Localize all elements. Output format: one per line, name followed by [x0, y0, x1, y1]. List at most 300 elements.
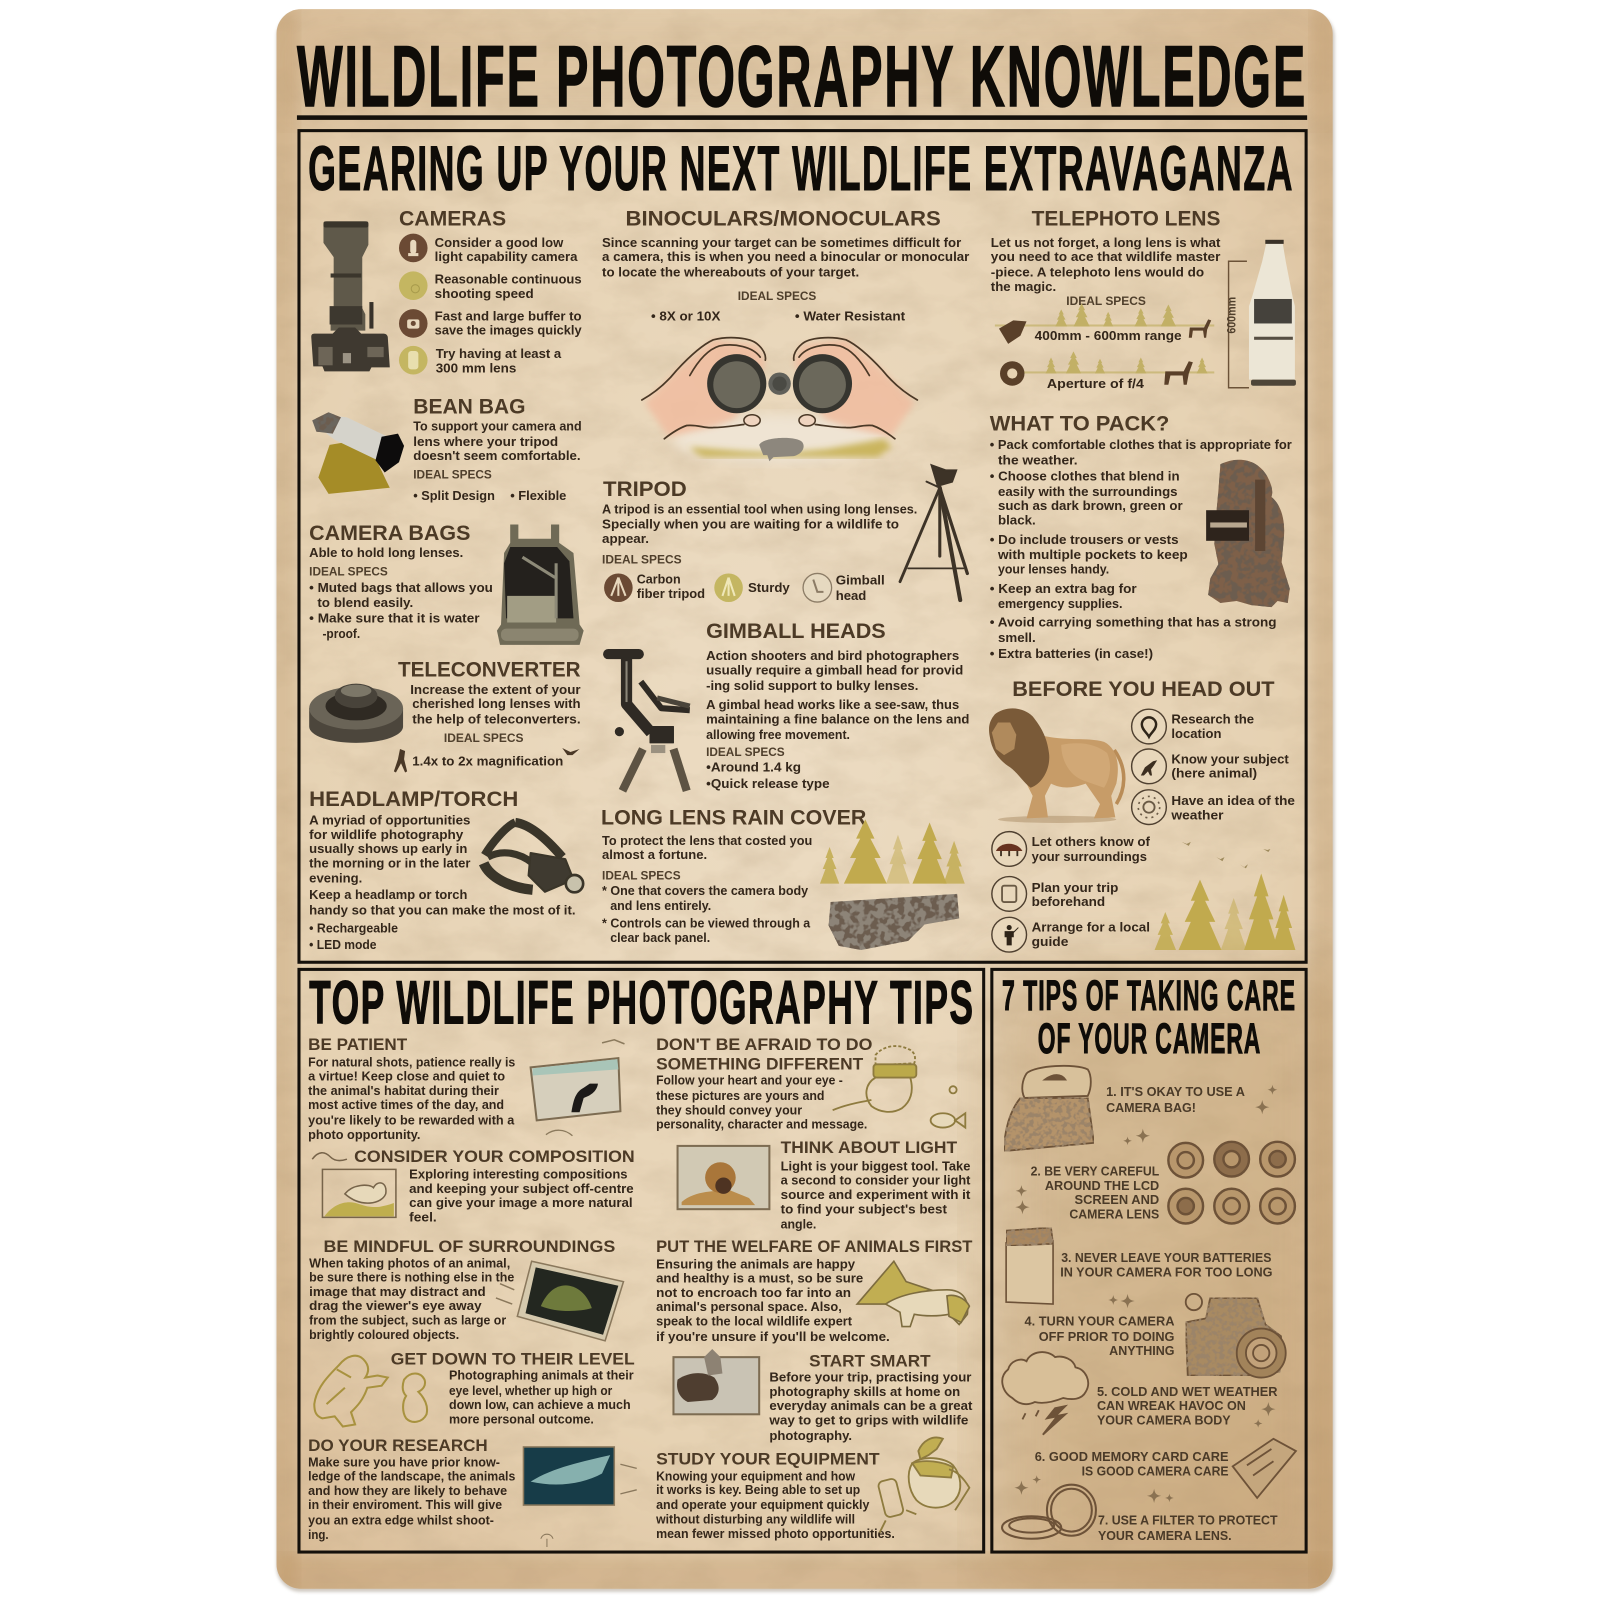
gimbal text: IDEAL SPECS: [706, 746, 785, 759]
headlamp text: handy so that you can make the most of it.: [309, 902, 576, 917]
tip: do your research: [308, 1436, 637, 1547]
tip 3 text: [1060, 1250, 1273, 1280]
composition text: [409, 1167, 634, 1224]
what to pack text: with multiple pockets to keep: [997, 547, 1188, 562]
what to pack text: your lenses handy.: [998, 561, 1109, 576]
mindful text: be sure there is nothing else in the: [309, 1270, 514, 1285]
gimbal text: [706, 648, 969, 791]
illustration: teleconverter: [309, 684, 403, 743]
study equipment text: and operate your equipment quickly: [656, 1497, 870, 1512]
tip 4: turn off camera: [1024, 1294, 1286, 1378]
before you head out text: your surroundings: [1032, 849, 1147, 864]
rain cover text: * One that covers the camera body: [602, 883, 809, 898]
what to pack text: easily with the surroundings: [998, 484, 1178, 499]
tip 5: cold and wet: [1002, 1352, 1278, 1435]
tip 5 text: [1097, 1384, 1278, 1427]
icon: shooting speed: [399, 271, 428, 300]
before you head out text: location: [1171, 726, 1221, 741]
illustration: gimbal head: [608, 654, 690, 791]
section: camera bags: [309, 521, 584, 645]
tip 2: lcd and lens: [1015, 1142, 1295, 1223]
composition text: Exploring interesting compositions: [409, 1167, 628, 1182]
telephoto text: the magic.: [991, 279, 1056, 294]
photo: lion: [678, 1146, 769, 1209]
icon: photographer silhouette: [394, 749, 407, 772]
mindful text: image that may distract and: [309, 1284, 486, 1299]
telephoto text: you need to ace that wildlife master: [991, 249, 1220, 264]
heading: tripod: TRIPOD: [603, 477, 687, 501]
be patient text: photo opportunity.: [308, 1127, 420, 1142]
illustration: camouflage rain cover: [829, 894, 959, 950]
before you head out text: Have an idea of the: [1171, 793, 1295, 808]
tip: start smart: [673, 1349, 973, 1443]
photo: cat: [673, 1349, 759, 1414]
start smart text: photography.: [769, 1428, 852, 1443]
what to pack text: such as dark brown, green or: [998, 498, 1183, 513]
telephoto text: -piece. A telephoto lens would do: [991, 265, 1204, 280]
cameras text: save the images quickly: [435, 323, 583, 338]
illustration: lion: [989, 708, 1124, 823]
tip: get down: [314, 1349, 635, 1427]
heading: camera bags: CAMERA BAGS: [309, 521, 470, 545]
icon: lens tag: [999, 320, 1027, 344]
welfare text: Ensuring the animals are happy: [656, 1256, 856, 1271]
before you head out text: [1032, 711, 1295, 949]
illustration: bean bag with camera: [312, 412, 404, 494]
cameras text: Reasonable continuous: [435, 272, 582, 287]
gimbal text: •Around 1.4 kg: [706, 759, 801, 774]
gimbal text: usually require a gimball head for provid: [706, 662, 963, 677]
sketch: snorkelling diver and fish: [833, 1046, 965, 1128]
get down text: down low, can achieve a much: [449, 1397, 631, 1412]
tip 4 text: [1024, 1314, 1175, 1358]
decorative sparkles: [1123, 1085, 1277, 1145]
what to pack text: • Extra batteries (in case!): [990, 646, 1153, 661]
heading: don't be afraid: SOMETHING DIFFERENT: [656, 1054, 864, 1073]
tip 6: memory card: [1035, 1439, 1296, 1498]
panel: top wildlife photography tips: [299, 968, 984, 1552]
icon: carbon tripod: [604, 573, 633, 602]
section: before you head out: [989, 677, 1295, 952]
what to pack text: • Choose clothes that blend in: [990, 469, 1180, 484]
tip 2 text: AROUND THE LCD: [1045, 1178, 1159, 1193]
heading: start smart: START SMART: [809, 1351, 931, 1370]
icon: sun: [1132, 790, 1166, 824]
section: tripod: [602, 465, 967, 603]
teleconverter text: IDEAL SPECS: [444, 732, 524, 745]
don't be afraid text: they should convey your: [656, 1102, 802, 1117]
welfare text: and healthy is a must, so be sure: [656, 1271, 863, 1286]
tip 2 text: [1031, 1164, 1159, 1221]
binoculars text: • Water Resistant: [795, 308, 906, 323]
icon: bird: [562, 748, 580, 755]
gimbal text: •Quick release type: [706, 776, 830, 791]
before you head out text: weather: [1170, 807, 1224, 822]
bean bag text: [413, 419, 582, 503]
icon: camera with long lens: [311, 221, 390, 371]
heading: before you head out: BEFORE YOU HEAD OUT: [1012, 677, 1274, 701]
welfare text: not to encroach too far into an: [656, 1285, 851, 1300]
tip 7 text: 7. USE A FILTER TO PROTECT: [1098, 1512, 1278, 1527]
before you head out text: Research the: [1171, 711, 1254, 726]
research text: Make sure you have prior know-: [308, 1454, 500, 1469]
think about light text: Light is your biggest tool. Take: [781, 1158, 970, 1173]
heading: get down: GET DOWN TO THEIR LEVEL: [391, 1349, 635, 1368]
be patient text: most active times of the day, and: [308, 1097, 504, 1112]
tip 4 text: OFF PRIOR TO DOING: [1039, 1329, 1175, 1344]
sketch: bird composition frame: [312, 1153, 396, 1217]
illustration: hands holding binoculars: [642, 338, 917, 463]
icon: animal: [1132, 749, 1166, 784]
bean bag text: To support your camera and: [413, 419, 582, 434]
heading: binoculars: BINOCULARS/MONOCULARS: [626, 207, 941, 231]
illustration: camera backpack: [497, 524, 584, 645]
tripod text: [602, 501, 917, 603]
bean bag text: lens where your tripod: [413, 434, 558, 449]
tip 2 text: SCREEN AND: [1074, 1192, 1159, 1207]
before you head out text: (here animal): [1171, 766, 1257, 781]
tripod text: fiber tripod: [637, 586, 705, 601]
start smart text: photography skills at home on: [769, 1384, 960, 1399]
sketch: battery: [1006, 1228, 1053, 1304]
label: 600mm: 600mm: [1226, 297, 1239, 334]
what to pack text: emergency supplies.: [998, 596, 1122, 611]
before you head out text: beforehand: [1032, 894, 1105, 909]
research text: and how they are likely to behave: [308, 1483, 507, 1498]
section: cameras: [311, 207, 583, 375]
think about light text: source and experiment with it: [781, 1187, 971, 1202]
composition text: can give your image a more natural: [409, 1195, 633, 1210]
camera bags text: to blend easily.: [317, 595, 413, 610]
be patient text: For natural shots, patience really is: [308, 1054, 515, 1069]
tip 7 text: [1098, 1512, 1278, 1543]
panel: gearing up: [299, 131, 1306, 962]
heading: think about light: THINK ABOUT LIGHT: [781, 1138, 958, 1157]
section: binoculars: [602, 207, 969, 463]
sketch: lens filters: [1002, 1485, 1096, 1539]
heading: don't be afraid: DON'T BE AFRAID TO DO: [656, 1035, 872, 1054]
gimbal text: A gimbal head works like a see-saw, thus: [706, 697, 959, 712]
decorative sparkles: [1108, 1294, 1135, 1308]
heading: 7 tips: 7 TIPS OF TAKING CARE: [1002, 972, 1296, 1020]
icon: plan trip: [992, 877, 1027, 911]
start smart text: [768, 1370, 973, 1443]
rain cover text: * Controls can be viewed through a: [602, 916, 811, 931]
what to pack text: • Pack comfortable clothes that is appropriate for: [990, 437, 1292, 452]
tip: don't be afraid: [656, 1035, 965, 1132]
rain cover text: To protect the lens that costed you: [602, 833, 812, 848]
think about light text: angle.: [781, 1217, 816, 1232]
tip 1 text: [1106, 1084, 1245, 1115]
icon: low light: [399, 234, 428, 262]
start smart text: way to get to grips with wildlife: [768, 1412, 968, 1427]
think about light text: to find your subject's best: [781, 1201, 948, 1216]
be patient text: you're likely to be rewarded with a: [308, 1112, 515, 1127]
gimbal text: Action shooters and bird photographers: [706, 648, 959, 663]
headlamp text: evening.: [309, 871, 362, 886]
headlamp text: Keep a headlamp or torch: [309, 887, 467, 902]
camera bags text: [309, 545, 493, 641]
mindful text: When taking photos of an animal,: [309, 1255, 510, 1270]
tripod text: Specially when you are waiting for a wildlife to: [602, 517, 899, 532]
bean bag text: • Flexible: [510, 488, 566, 503]
tip 7 text: YOUR CAMERA LENS.: [1098, 1528, 1232, 1543]
dimension bracket: [1229, 261, 1249, 388]
headlamp text: [309, 812, 576, 952]
what to pack text: • Do include trousers or vests: [990, 532, 1179, 547]
tip 6 text: IS GOOD CAMERA CARE: [1082, 1464, 1229, 1479]
section: bean bag: [312, 394, 582, 503]
sketch: mountain and polar bear: [857, 1261, 969, 1327]
teleconverter text: 1.4x to 2x magnification: [412, 753, 563, 768]
sketch: memory card: [1233, 1439, 1296, 1498]
cameras text: Fast and large buffer to: [435, 308, 582, 323]
icon: aperture: [1000, 361, 1024, 386]
heading: teleconverter: TELECONVERTER: [398, 658, 581, 682]
gimbal text: allowing free movement.: [706, 727, 850, 742]
decorative sparkles: [1014, 1475, 1174, 1503]
icon: location pin: [1132, 709, 1166, 744]
tip 1 text: CAMERA BAG!: [1106, 1100, 1196, 1115]
don't be afraid text: Follow your heart and your eye -: [656, 1073, 843, 1088]
icon: gimbal head: [803, 573, 832, 602]
study equipment text: it works is key. Being able to set up: [656, 1482, 860, 1497]
bean bag text: IDEAL SPECS: [413, 469, 492, 482]
research text: ing.: [308, 1527, 329, 1542]
tip 4 text: 4. TURN YOUR CAMERA: [1024, 1314, 1174, 1329]
heading: study equipment: STUDY YOUR EQUIPMENT: [656, 1449, 880, 1468]
heading: what to pack: WHAT TO PACK?: [990, 412, 1169, 436]
tip 7: filter: [1002, 1475, 1278, 1543]
decorative sparkles: [1015, 1185, 1030, 1214]
study equipment text: mean fewer missed photo opportunities.: [656, 1526, 895, 1541]
camera bags text: -proof.: [322, 626, 360, 641]
rain cover text: IDEAL SPECS: [602, 870, 681, 883]
composition text: feel.: [409, 1209, 437, 1224]
study equipment text: Knowing your equipment and how: [656, 1469, 855, 1484]
what to pack text: black.: [998, 512, 1036, 527]
welfare text: if you're unsure if you'll be welcome.: [656, 1329, 890, 1344]
tip 6 text: 6. GOOD MEMORY CARD CARE: [1035, 1449, 1229, 1464]
section: telephoto lens: [991, 207, 1296, 391]
tip 6 text: [1035, 1449, 1229, 1479]
tripod text: Carbon: [637, 572, 681, 587]
headlamp text: • Rechargeable: [309, 921, 398, 936]
gimbal text: -ing solid support to bulky lenses.: [706, 678, 918, 693]
mindful text: from the subject, such as large or: [309, 1312, 506, 1327]
tip: think about light: [678, 1138, 971, 1232]
tripod text: head: [836, 588, 866, 603]
binoculars text: • 8X or 10X: [651, 308, 721, 323]
sketch: crouching photographer and monkey: [314, 1356, 427, 1427]
heading: telephoto lens: TELEPHOTO LENS: [1032, 207, 1220, 231]
headlamp text: usually shows up early in: [309, 841, 467, 856]
teleconverter text: Increase the extent of your: [410, 682, 581, 697]
be patient text: [308, 1054, 515, 1142]
headlamp text: for wildlife photography: [309, 827, 464, 842]
tip 2 text: 2. BE VERY CAREFUL: [1031, 1164, 1159, 1179]
cameras text: Consider a good low: [435, 235, 563, 250]
metal sign card background: [267, 9, 1342, 1596]
mindful text: brightly coloured objects.: [309, 1327, 459, 1342]
cameras text: shooting speed: [435, 286, 534, 301]
headlamp text: A myriad of opportunities: [309, 812, 470, 827]
tip 1 text: 1. IT'S OKAY TO USE A: [1106, 1084, 1245, 1099]
what to pack text: • Keep an extra bag for: [990, 581, 1137, 596]
rain cover text: almost a fortune.: [602, 847, 707, 862]
heading: mindful: BE MINDFUL OF SURROUNDINGS: [323, 1237, 615, 1256]
tripod text: Sturdy: [748, 580, 791, 595]
tip 1: camera bag: [1004, 1066, 1277, 1151]
teleconverter text: the help of teleconverters.: [412, 711, 581, 726]
tip 5 text: CAN WREAK HAVOC ON: [1097, 1398, 1246, 1413]
heading: top tips: TOP WILDLIFE PHOTOGRAPHY TIPS: [309, 968, 974, 1036]
gimbal text: maintaining a fine balance on the lens and: [706, 711, 969, 726]
bean bag text: doesn't seem comfortable.: [413, 448, 581, 463]
icon: buffer: [399, 309, 428, 338]
camera bags text: • Make sure that it is water: [309, 610, 480, 625]
tip 4 text: ANYTHING: [1109, 1343, 1175, 1358]
think about light text: [781, 1158, 971, 1232]
heading: gimbal heads: GIMBALL HEADS: [706, 619, 886, 643]
tripod text: IDEAL SPECS: [602, 553, 682, 566]
what to pack text: • Avoid carrying something that has a strong: [990, 615, 1277, 630]
tripod text: Gimball: [836, 573, 885, 588]
section: rain cover: [601, 805, 965, 950]
tip 3: batteries: [1006, 1228, 1273, 1308]
tip: welfare of animals: [656, 1237, 973, 1344]
illustration: camouflage backpack: [1206, 460, 1290, 607]
tip 2 text: CAMERA LENS: [1069, 1206, 1159, 1221]
tip 3 text: 3. NEVER LEAVE YOUR BATTERIES: [1061, 1250, 1271, 1265]
heading: bean bag: BEAN BAG: [413, 394, 526, 418]
photo: turtle: [496, 1261, 623, 1341]
get down text: [449, 1368, 634, 1426]
teleconverter text: [410, 682, 581, 768]
binoculars text: [602, 235, 969, 323]
camera bags text: Able to hold long lenses.: [309, 545, 463, 560]
heading: composition: CONSIDER YOUR COMPOSITION: [354, 1147, 635, 1166]
welfare text: animal's personal space. Also,: [656, 1299, 842, 1314]
binoculars text: to locate the whereabouts of your target.: [602, 265, 859, 280]
spec strips with trees: [995, 303, 1214, 373]
tripod text: appear.: [602, 531, 649, 546]
tip: study your equipment: [655, 1437, 969, 1541]
heading: headlamp: HEADLAMP/TORCH: [309, 787, 518, 811]
panel: 7 tips of taking care of your camera: [992, 969, 1306, 1552]
illustration: telephoto lens: [1249, 240, 1296, 386]
camera bags text: • Muted bags that allows you: [309, 580, 493, 595]
what to pack text: [990, 437, 1292, 661]
headlamp text: the morning or in the later: [309, 855, 470, 870]
sketch: storm cloud: [1002, 1352, 1088, 1435]
sketch: six lenses: [1168, 1142, 1295, 1223]
icon: deer large: [1164, 361, 1193, 385]
tip: be mindful: [309, 1237, 623, 1342]
section: teleconverter: [309, 658, 581, 772]
section: headlamp: [309, 787, 583, 952]
welfare text: [656, 1256, 890, 1344]
heading: don't be afraid: [656, 1035, 872, 1073]
mindful text: [309, 1255, 514, 1342]
illustration: forest: [820, 819, 965, 884]
icon: let others know: [992, 832, 1027, 866]
icon: sturdy tripod: [714, 573, 743, 602]
don't be afraid text: personality, character and message.: [656, 1117, 867, 1132]
welfare text: speak to the local wildlife expert: [656, 1314, 853, 1329]
binoculars text: Since scanning your target can be sometimes difficult for: [602, 235, 961, 250]
photo: whale: [531, 1040, 624, 1136]
binoculars text: IDEAL SPECS: [738, 290, 817, 303]
teleconverter text: cherished long lenses with: [412, 696, 581, 711]
tip 5 text: 5. COLD AND WET WEATHER: [1097, 1384, 1278, 1399]
tip 5 text: YOUR CAMERA BODY: [1097, 1412, 1231, 1427]
bean bag text: • Split Design: [413, 488, 495, 503]
cameras text: [435, 235, 583, 375]
heading: welfare: PUT THE WELFARE OF ANIMALS FIRST: [656, 1237, 973, 1256]
get down text: more personal outcome.: [449, 1411, 594, 1426]
study equipment text: without disturbing any wildlife will: [655, 1511, 855, 1526]
before you head out text: Know your subject: [1171, 751, 1290, 766]
photo: shark: [523, 1447, 637, 1547]
telephoto text: [991, 235, 1221, 391]
sketch: person with bird and lens: [877, 1437, 969, 1533]
cameras text: Try having at least a: [436, 346, 562, 361]
headlamp text: • LED mode: [309, 937, 377, 952]
study equipment text: [655, 1469, 895, 1541]
be patient text: the animal's habitat during their: [308, 1083, 499, 1098]
binoculars text: a camera, this is when you need a binocular or monocular: [602, 249, 969, 264]
get down text: eye level, whether up high or: [449, 1383, 612, 1398]
don't be afraid text: these pictures are yours and: [656, 1088, 824, 1103]
composition text: and keeping your subject off-centre: [409, 1181, 634, 1196]
sketch: camera bag: [1004, 1066, 1094, 1151]
rain cover text: [602, 833, 812, 945]
icon: lens: [399, 346, 428, 374]
section: what to pack: [990, 412, 1292, 661]
decorative sparkles: [1254, 1402, 1276, 1428]
tip 3 text: IN YOUR CAMERA FOR TOO LONG: [1060, 1265, 1273, 1280]
research text: [308, 1454, 515, 1542]
get down text: Photographing animals at their: [449, 1368, 634, 1383]
mindful text: drag the viewer's eye away: [309, 1298, 483, 1313]
sketch: retro camera: [1186, 1294, 1286, 1378]
camera bags text: IDEAL SPECS: [309, 566, 388, 579]
research text: ledge of the landscape, the animals: [308, 1469, 515, 1484]
heading: 7 tips: [1002, 972, 1296, 1063]
tripod text: A tripod is an essential tool when using long lenses.: [602, 501, 917, 516]
what to pack text: smell.: [998, 630, 1036, 645]
icon: deer small: [1189, 319, 1211, 338]
before you head out text: Plan your trip: [1032, 880, 1119, 895]
telephoto text: IDEAL SPECS: [1066, 295, 1146, 308]
illustration: forest with birds: [1155, 842, 1295, 950]
telephoto text: 400mm - 600mm range: [1035, 328, 1182, 343]
start smart text: Before your trip, practising your: [769, 1370, 971, 1385]
section: gimbal heads: [608, 619, 969, 791]
tip: be patient: [308, 1035, 624, 1142]
illustration: headlamp: [484, 822, 583, 892]
think about light text: a second to consider your light: [781, 1173, 971, 1188]
telephoto text: Let us not forget, a long lens is what: [991, 235, 1221, 250]
heading: 7 tips: OF YOUR CAMERA: [1038, 1015, 1261, 1063]
don't be afraid text: [656, 1073, 867, 1132]
start smart text: everyday animals can be a great: [769, 1398, 973, 1413]
cameras text: 300 mm lens: [436, 360, 516, 375]
research text: in their enviroment. This will give: [308, 1497, 502, 1512]
be patient text: a virtue! Keep close and quiet to: [308, 1069, 505, 1084]
icon: local guide: [992, 917, 1027, 952]
